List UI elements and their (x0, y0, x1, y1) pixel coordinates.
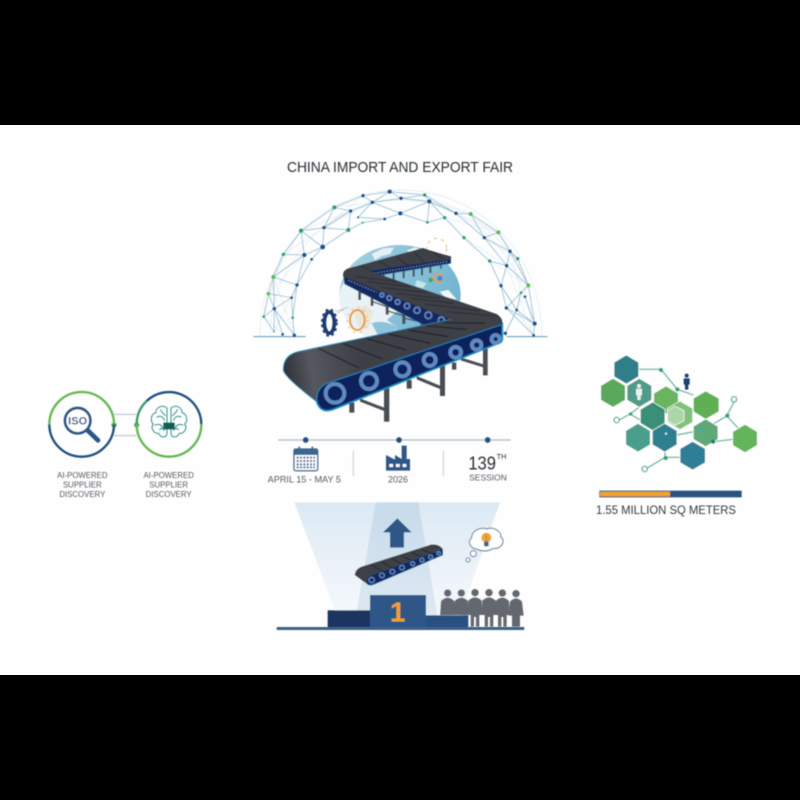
conveyor legs (349, 263, 488, 422)
crowd of people (440, 589, 524, 627)
icon: factory (386, 446, 410, 471)
globe (339, 245, 461, 345)
gears (322, 238, 447, 336)
label: session: SESSION (469, 472, 507, 482)
label: date: APRIL 15 - MAY 5 (268, 475, 341, 485)
icon: AI brain ring (137, 392, 201, 457)
label: first discovery: AI-POWERED (57, 471, 108, 480)
network lines (614, 369, 740, 472)
network dots (629, 368, 729, 460)
label: session number: 139 (468, 453, 496, 474)
thought bubble with lightbulb (466, 528, 503, 562)
label: second discovery: DISCOVERY (146, 490, 192, 499)
connector lines (111, 414, 139, 436)
base line (277, 627, 524, 630)
spotlight beams (294, 502, 500, 616)
label: floor area: 1.55 MILLION SQ METERS (596, 503, 736, 517)
label: th suffix: TH (497, 452, 506, 461)
panel: left AI supplier discovery (49, 392, 201, 499)
title: CHINA IMPORT AND EXPORT FAIR (287, 159, 513, 176)
icon: calendar (294, 447, 318, 471)
label: first discovery: DISCOVERY (59, 490, 106, 499)
arrow up (383, 518, 412, 548)
icon: person navy (684, 374, 690, 390)
icon: ISO magnifier ring: ISO (68, 416, 88, 428)
illustration: network dome with globe and conveyor (253, 190, 547, 422)
panel: timeline facts (268, 437, 524, 630)
icon: ISO magnifier ring (49, 392, 114, 457)
conveyor belt surface (283, 248, 502, 402)
label: first discovery: SUPPLIER (63, 480, 102, 489)
network dome (253, 190, 547, 337)
hexagon cluster (601, 355, 757, 470)
conveyor side panels and rollers (316, 258, 502, 411)
timeline line (278, 437, 511, 476)
podium (328, 595, 468, 628)
infographic content (49, 159, 757, 630)
label: second discovery: AI-POWERED (143, 471, 194, 480)
podium: 1 (390, 597, 405, 628)
mini conveyor (355, 544, 443, 585)
label: year: 2026 (388, 475, 408, 485)
progress bar (599, 491, 742, 497)
panel: hexagon network and floor area (596, 355, 757, 517)
icon: person white (636, 384, 642, 400)
label: second discovery: SUPPLIER (149, 480, 188, 489)
